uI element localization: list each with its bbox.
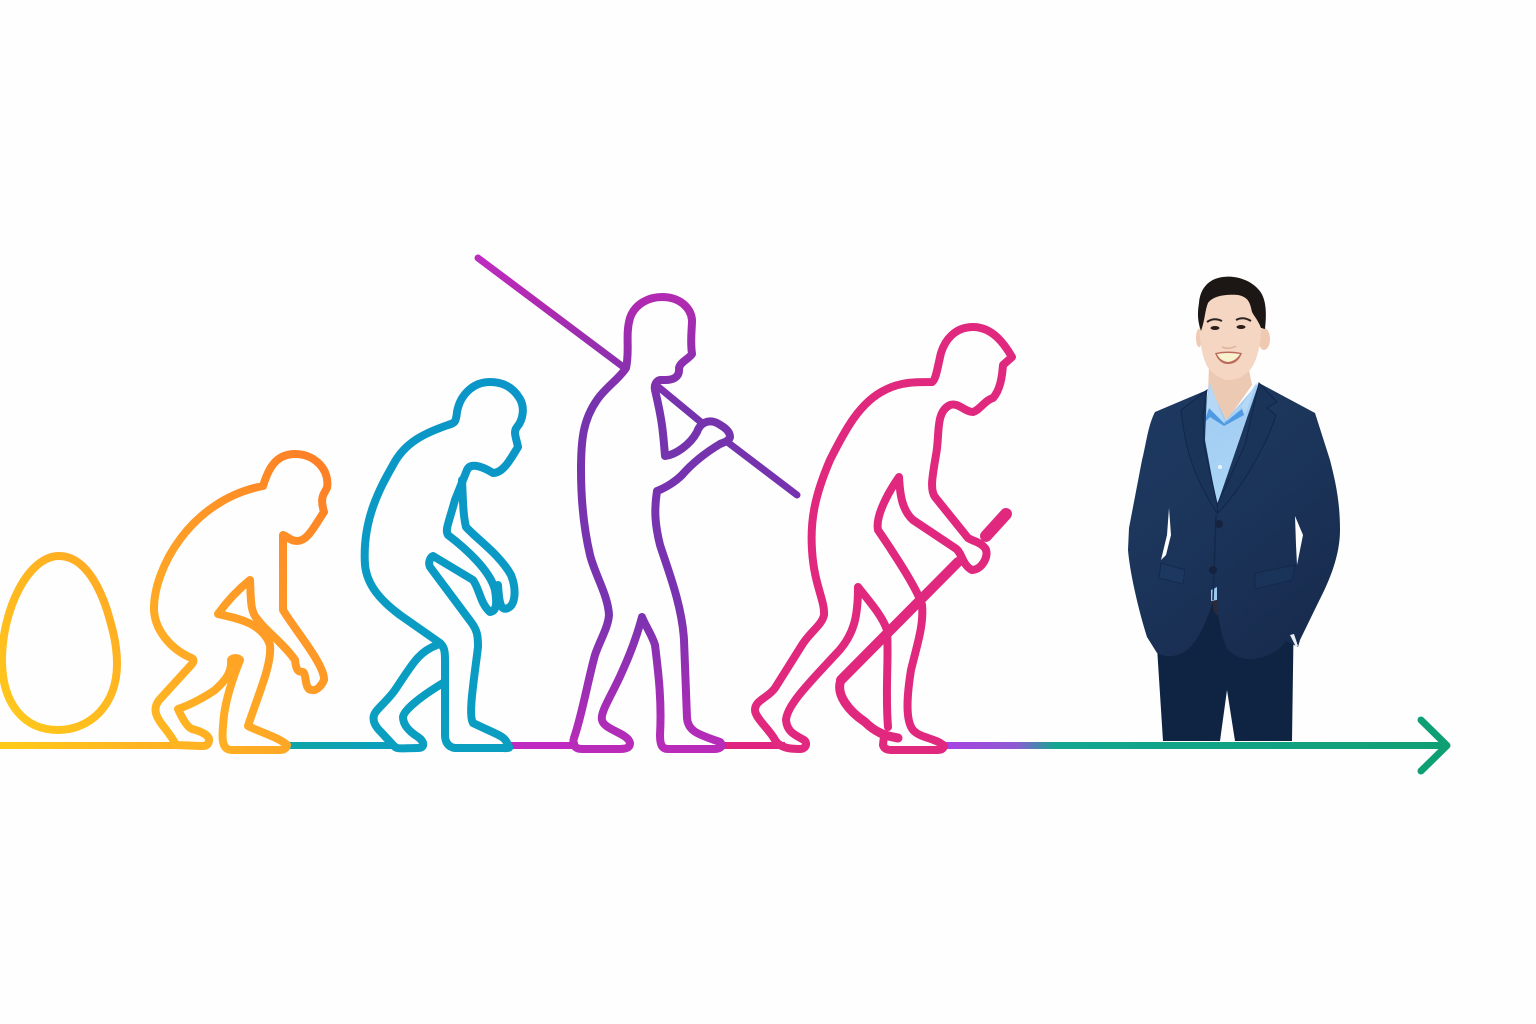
hair <box>1198 277 1266 331</box>
teeth <box>1217 353 1240 362</box>
trousers <box>1154 600 1294 741</box>
timeline segment: violet to green <box>943 742 1446 749</box>
left ear <box>1196 329 1202 347</box>
centre front line <box>1213 515 1216 600</box>
timeline segment: magenta <box>508 742 578 749</box>
left collar wing <box>1205 383 1225 424</box>
upright human body outline <box>573 297 730 749</box>
icon: egg outline <box>2 556 117 730</box>
panel: timeline baseline and arrow <box>0 720 1447 771</box>
jacket button bottom <box>1209 566 1217 574</box>
timeline segment: pink <box>722 742 785 749</box>
heel of standing foot <box>883 736 944 750</box>
early human body outline <box>365 382 523 748</box>
left pocket flap <box>1159 563 1185 584</box>
left eyebrow <box>1207 319 1222 322</box>
left lapel <box>1181 390 1218 513</box>
right ear <box>1258 328 1270 350</box>
ape body outline <box>154 454 327 750</box>
spear, rear section <box>478 258 622 366</box>
lips <box>1215 352 1242 364</box>
timeline segment: teal <box>287 742 395 749</box>
figure: upright human with spear <box>478 258 797 749</box>
left eye <box>1210 326 1220 330</box>
right eyebrow <box>1236 318 1251 321</box>
jacket button top <box>1215 520 1223 528</box>
shirt button <box>1218 465 1222 469</box>
jacket <box>1128 383 1340 659</box>
figure: crouching ape <box>154 454 327 750</box>
walking stick upper grip <box>986 514 1006 536</box>
bent human body outline <box>755 327 1012 749</box>
shirt <box>1204 383 1258 506</box>
right cuff <box>1290 634 1298 647</box>
face <box>1199 292 1261 380</box>
timeline segment: yellow <box>0 742 205 749</box>
nose shadow <box>1222 346 1236 348</box>
arrow head <box>1421 720 1447 771</box>
walking stick curved lower end <box>840 680 898 738</box>
right lapel <box>1217 383 1277 513</box>
gap between left arm and torso <box>1161 508 1171 560</box>
early human near arm <box>462 480 515 609</box>
right collar wing <box>1225 382 1257 424</box>
gap between right arm and torso <box>1295 516 1303 565</box>
belt <box>1212 601 1218 616</box>
neck <box>1208 365 1252 422</box>
shirt hem at jacket opening <box>1211 587 1217 601</box>
early human back leg <box>374 645 443 748</box>
spear, front section <box>656 385 797 495</box>
photo illustration: man in navy suit with hands in pockets <box>1128 277 1340 741</box>
walking stick shaft <box>841 562 958 680</box>
figure: stooped early human <box>365 382 523 748</box>
figure: bent human with walking stick <box>755 327 1012 750</box>
right pocket flap <box>1255 565 1295 589</box>
shirt collar <box>1204 408 1244 426</box>
right eye <box>1236 325 1246 329</box>
